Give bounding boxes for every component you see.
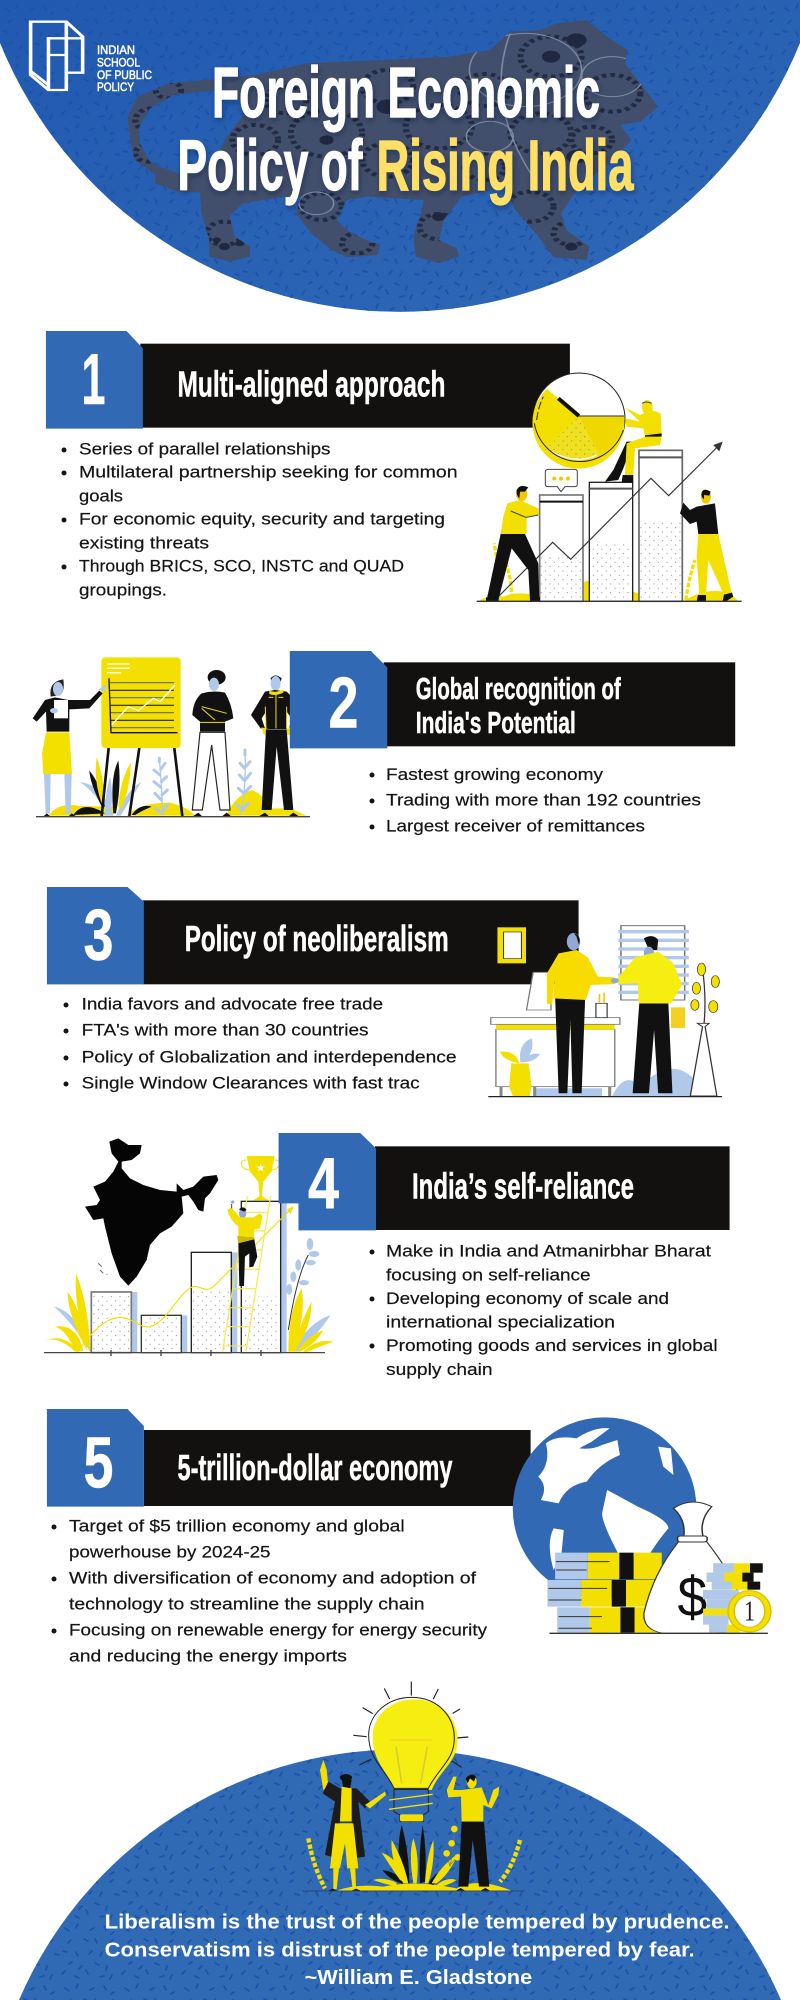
bullet list: groupings.: [79, 581, 167, 600]
bullet list: Promoting goods and services in global: [386, 1336, 718, 1355]
bullet list: existing threats: [79, 534, 209, 553]
bullet list: [370, 1242, 718, 1379]
logo mark: [31, 22, 83, 90]
header: blue semicircle: [0, 0, 800, 312]
illustration: light bulb with two people: [307, 1682, 525, 1891]
quote text: Conservatism is distrust of the people tempered by fear.: [105, 1939, 695, 1962]
bullet list: [370, 765, 701, 836]
logo: Indian School of Public Policy: [31, 22, 152, 94]
panel: section 4 self-reliance: [44, 1133, 730, 1379]
bullet list: goals: [79, 487, 123, 506]
heading text: India’s self-reliance: [412, 1166, 634, 1207]
bullet list: international specialization: [386, 1313, 615, 1332]
heading text: Multi-aligned approach: [178, 364, 446, 405]
heading bar: [279, 1133, 730, 1230]
bullet list: [64, 994, 457, 1093]
title: Policy of: [178, 127, 363, 206]
heading text: Policy of neoliberalism: [185, 918, 449, 959]
illustration: handshake at office desk: [488, 926, 722, 1097]
logo text: INDIAN: [97, 43, 135, 57]
bullet list: Focusing on renewable energy for energy security: [69, 1621, 488, 1640]
quote text: [105, 1911, 730, 1989]
heading text: 5-trillion-dollar economy: [178, 1447, 452, 1488]
illustration: globe and money: $: [678, 1566, 707, 1629]
bullet list: Series of parallel relationships: [79, 440, 330, 459]
number 4: 4: [308, 1144, 339, 1224]
logo text: SCHOOL: [97, 56, 140, 70]
bullet list: Policy of Globalization and interdependence: [82, 1047, 457, 1066]
panel: section 3 policy of neoliberalism: [47, 887, 722, 1097]
bullet list: [62, 440, 458, 600]
title: [178, 54, 634, 206]
bullet list: supply chain: [386, 1360, 493, 1379]
number 2: 2: [328, 663, 358, 743]
number 1: 1: [82, 340, 106, 420]
number 3: 3: [84, 895, 114, 975]
bullet list: focusing on self-reliance: [386, 1266, 591, 1285]
bullet list: Fastest growing economy: [386, 765, 604, 784]
title: Rising India: [376, 127, 634, 206]
heading text: Global recognition of: [416, 671, 621, 706]
illustration: people with bar chart and pie: [477, 373, 742, 601]
footer: blue semicircle with quote: [19, 1682, 781, 2000]
heading bar: [47, 1409, 531, 1507]
illustration: India map and rising bar chart: ★: [256, 1160, 266, 1174]
bullet list: India favors and advocate free trade: [82, 994, 383, 1013]
icon: map of India: [85, 1138, 218, 1286]
panel: section 5 five-trillion-dollar economy: [47, 1409, 771, 1666]
quote text: Liberalism is the trust of the people tempered by prudence.: [105, 1911, 730, 1934]
bullet list: Target of $5 trillion economy and global: [69, 1517, 405, 1536]
bullet list: Trading with more than 192 countries: [386, 791, 701, 810]
bullet list: Largest receiver of remittances: [386, 817, 645, 836]
bullet list: Developing economy of scale and: [386, 1289, 669, 1308]
logo text: POLICY: [97, 80, 134, 94]
bullet list: For economic equity, security and targeting: [79, 510, 445, 529]
bullet list: Make in India and Atmanirbhar Bharat: [386, 1242, 711, 1261]
bullet list: powerhouse by 2024-25: [69, 1543, 270, 1562]
number 5: 5: [84, 1423, 114, 1503]
heading text: [416, 671, 621, 740]
heading bar: [47, 887, 579, 984]
bullet list: Single Window Clearances with fast trac: [82, 1074, 420, 1093]
illustration: India map and rising bar chart: [44, 1138, 333, 1356]
logo text: OF PUBLIC: [97, 68, 152, 82]
illustration: globe and money: 1: [744, 1595, 755, 1627]
bullet list: With diversification of economy and adoption of: [69, 1569, 476, 1588]
bullet list: [52, 1517, 488, 1666]
panel: section 1 multi-aligned approach: [46, 331, 742, 601]
heading text: India's Potential: [416, 705, 576, 740]
heading bar: [290, 651, 735, 748]
bullet list: and reducing the energy imports: [69, 1647, 347, 1666]
bullet list: FTA's with more than 30 countries: [82, 1021, 369, 1040]
image: lion made of gears: [122, 17, 663, 267]
panel: section 2 global recognition: [33, 651, 735, 836]
heading bar: [46, 331, 570, 429]
logo text: [97, 43, 152, 94]
quote text: ~William E. Gladstone: [305, 1966, 532, 1989]
bullet list: technology to streamline the supply chain: [69, 1595, 425, 1614]
illustration: globe and money: [513, 1417, 771, 1633]
bullet list: Through BRICS, SCO, INSTC and QUAD: [79, 557, 404, 576]
illustration: team with flipchart: [33, 657, 310, 817]
bullet list: Multilateral partnership seeking for common: [79, 463, 458, 482]
